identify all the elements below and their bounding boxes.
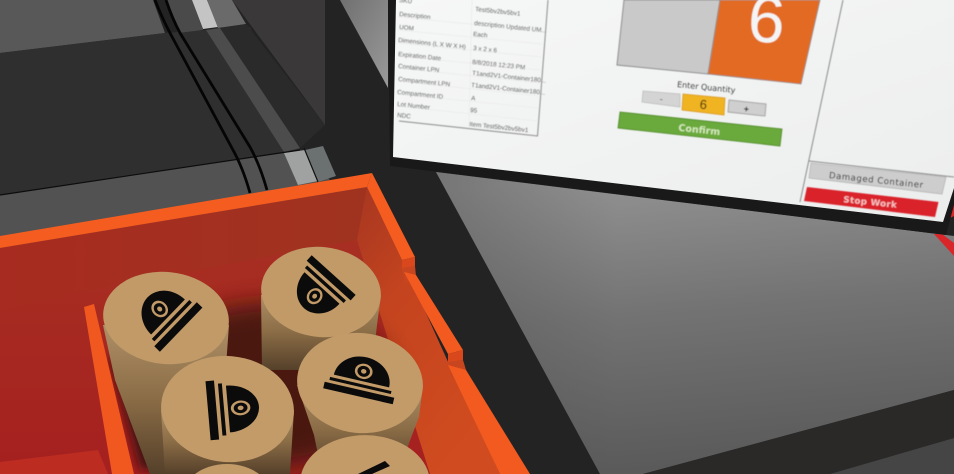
details table: Expiration Date — [398, 51, 442, 63]
quantity value: 6 — [699, 97, 708, 112]
stop work button — [804, 187, 938, 217]
cylinder 5 — [301, 435, 429, 474]
container compartment diagram — [617, 0, 820, 84]
desk front face — [643, 390, 954, 474]
details table: description Updated UM... — [474, 20, 547, 35]
details table: Item Test5bv2bv5bv1 — [469, 121, 529, 134]
plus button — [728, 100, 766, 116]
minus button: - — [659, 94, 663, 104]
details table: T1and2V1-Container180... — [472, 70, 547, 85]
details table: Each — [473, 31, 488, 40]
cylinder 1 — [99, 266, 233, 474]
grey panel behind monitor — [340, 0, 388, 88]
cylinder 4 — [292, 327, 428, 474]
quantity label: Enter Quantity — [677, 80, 736, 95]
details table — [397, 0, 548, 136]
icon: dome mark — [323, 349, 402, 404]
details table: Container LPN — [398, 63, 440, 74]
details table: T1and2V1-Container180... — [471, 82, 546, 97]
details table: Dimensions (L X W X H) — [398, 37, 466, 51]
damaged container button: Damaged Container — [828, 171, 924, 191]
details table: Compartment LPN — [398, 76, 451, 88]
conveyor: track bands and rails — [0, 0, 336, 240]
icon: dome mark — [282, 255, 356, 328]
container interior — [0, 187, 500, 474]
stop work button: Stop Work — [843, 195, 898, 211]
desk surface — [436, 172, 954, 474]
monitor — [388, 0, 954, 235]
cylinder 2 — [257, 241, 385, 370]
orange container — [0, 173, 530, 474]
sidebar divider — [800, 0, 954, 202]
minus button — [642, 91, 680, 107]
confirm button — [618, 112, 782, 146]
monitor frame — [388, 0, 954, 235]
details table: NDC — [397, 112, 412, 120]
touchscreen — [393, 0, 954, 222]
left compartment divider — [84, 304, 134, 474]
floor below desk — [830, 438, 954, 474]
icon: dome mark — [126, 275, 202, 352]
confirm button: Confirm — [678, 123, 721, 138]
icon: dome mark — [205, 377, 262, 440]
details table: A — [471, 95, 476, 103]
details table: 95 — [470, 107, 478, 115]
details table: Compartment ID — [397, 89, 444, 101]
red cable behind monitor — [934, 202, 954, 256]
icon: dome mark bar — [358, 461, 390, 474]
quantity value — [682, 94, 725, 115]
damaged container button — [809, 163, 946, 194]
cylinder 3 — [157, 350, 298, 474]
details table: UOM — [399, 24, 414, 33]
details table: Description — [399, 11, 431, 21]
details table: 3 x 2 x 6 — [473, 45, 498, 55]
plus button: + — [743, 104, 749, 114]
container rim — [0, 173, 530, 474]
details table: Test5bv2bv5bv1 — [475, 6, 521, 18]
details table: Lot Number — [397, 101, 430, 111]
details table: 8/8/2018 12:23 PM — [472, 59, 525, 72]
cylinder 6 — [195, 464, 259, 474]
